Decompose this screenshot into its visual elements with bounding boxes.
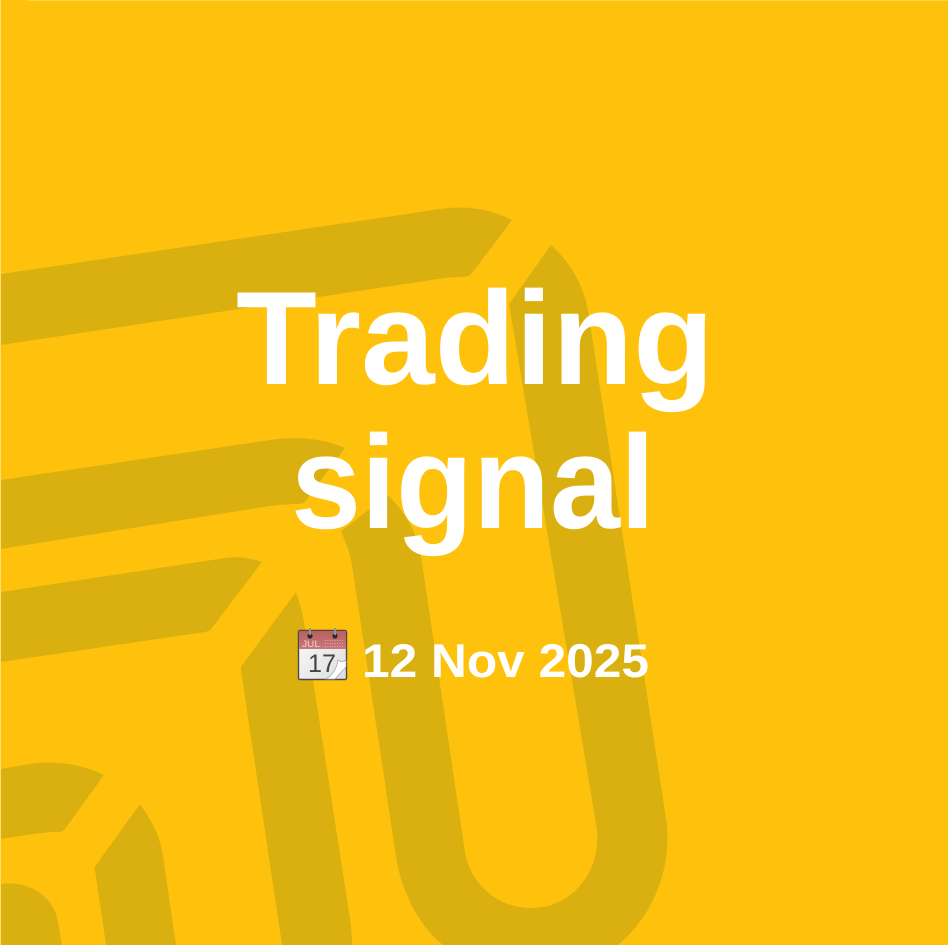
title <box>236 265 714 557</box>
background logo pattern <box>1 207 667 945</box>
title: signal <box>291 409 655 557</box>
title: Trading <box>236 265 714 413</box>
icon: calendar <box>298 628 346 680</box>
icon: calendar: 17 <box>308 650 336 678</box>
icon: calendar: JUL <box>302 639 320 650</box>
date: 12 Nov 2025 <box>362 634 649 687</box>
